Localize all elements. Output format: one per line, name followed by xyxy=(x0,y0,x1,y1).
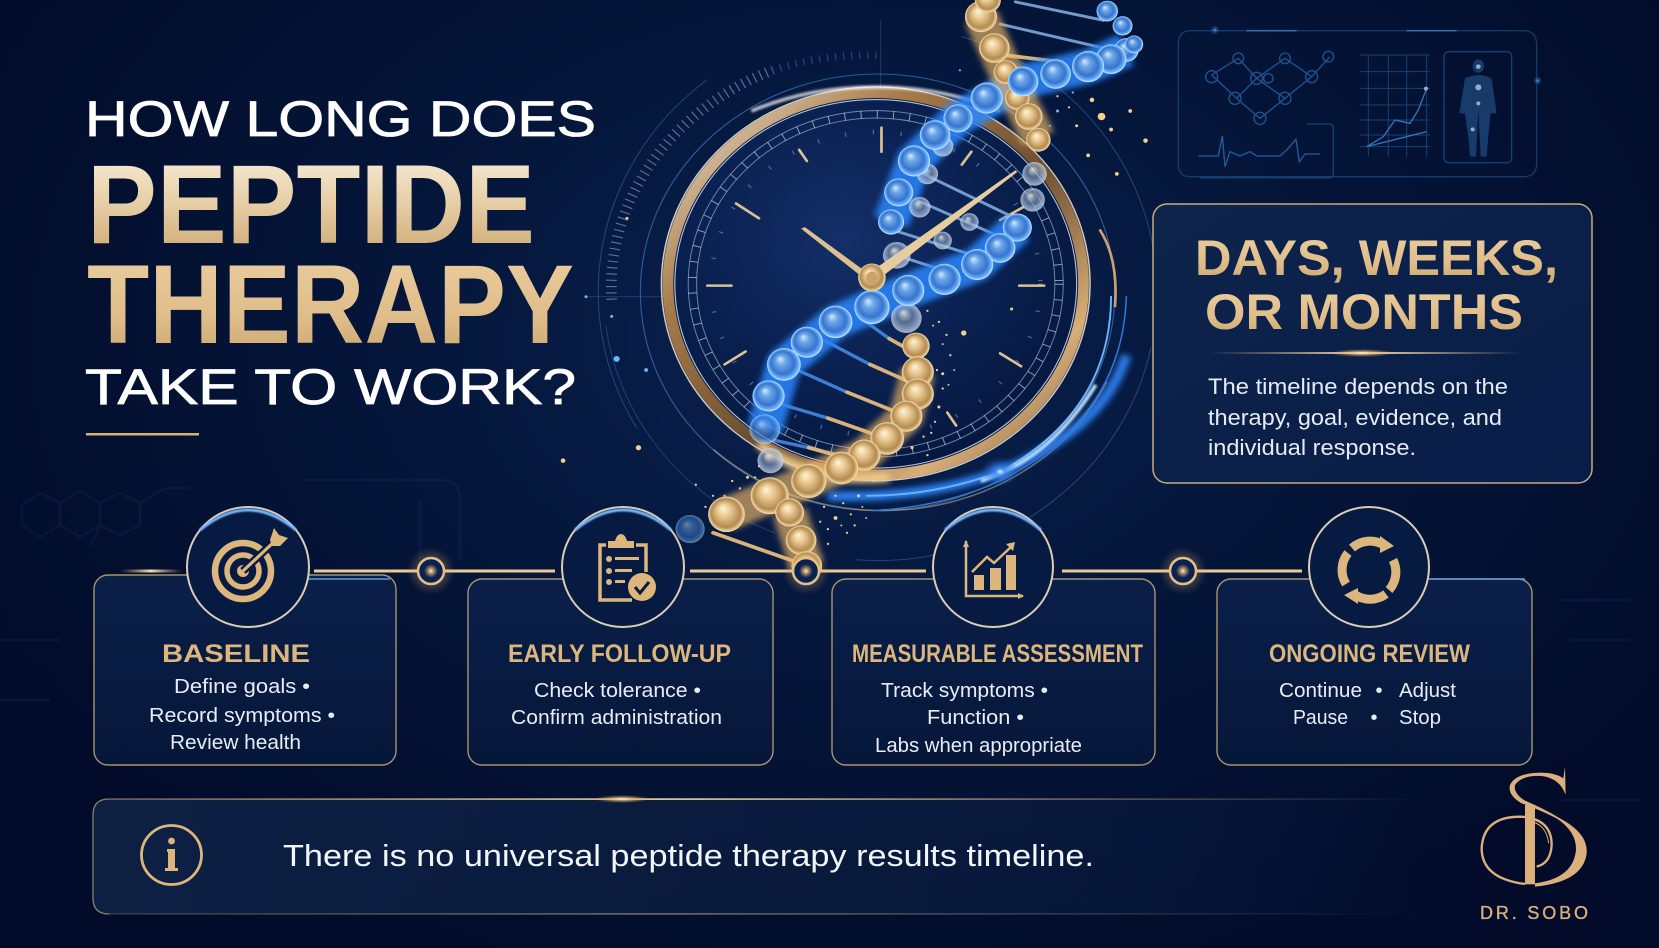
card body: Check tolerance • xyxy=(534,680,701,702)
timeline node 2 xyxy=(782,547,830,595)
timeline connector xyxy=(120,547,1302,595)
card body: Record symptoms • xyxy=(149,705,335,727)
logo monogram xyxy=(1482,767,1587,887)
card body xyxy=(149,676,335,754)
panel body text xyxy=(1208,374,1508,460)
card body: Adjust xyxy=(1399,680,1456,702)
panel: days weeks or months xyxy=(1153,204,1592,483)
card body xyxy=(875,680,1082,757)
icon: growth chart xyxy=(933,507,1053,627)
clock: outer HUD rings xyxy=(587,20,1157,561)
DNA: sparkles xyxy=(561,95,1148,545)
clock: hour markers xyxy=(707,128,1044,426)
card body xyxy=(1279,680,1456,729)
card body: Labs when appropriate xyxy=(875,735,1082,757)
clock: hands xyxy=(801,170,1017,292)
title line: peptide: PEPTIDE xyxy=(87,142,535,267)
DNA: rungs xyxy=(713,2,1103,562)
title line: take to work: TAKE TO WORK? xyxy=(85,359,576,415)
panel: diagnostic HUD xyxy=(1178,25,1542,178)
faint molecule pattern xyxy=(0,480,1640,800)
panel heading xyxy=(1195,230,1558,340)
logo: Dr. Sobo xyxy=(1480,767,1588,923)
card: baseline xyxy=(94,507,396,765)
card body: Pause xyxy=(1293,707,1348,729)
card body: Review health xyxy=(170,732,301,754)
title underline xyxy=(86,433,199,436)
card body: • xyxy=(1375,680,1383,702)
panel heading: DAYS, WEEKS, xyxy=(1195,230,1558,286)
DNA: pale translucent beads xyxy=(757,136,1047,473)
timeline node 3 xyxy=(1159,547,1207,595)
clock: bezel ring xyxy=(661,87,1090,481)
panel body text: therapy, goal, evidence, and xyxy=(1208,405,1502,430)
DNA: gold strand beads xyxy=(708,0,1051,581)
card body: • xyxy=(1370,707,1378,729)
card body: Stop xyxy=(1399,707,1441,729)
card heading: MEASURABLE ASSESSMENT xyxy=(852,640,1143,668)
logo wordmark: DR. SOBO xyxy=(1480,903,1588,923)
clock: blue swoosh xyxy=(828,229,1126,511)
icon: clipboard xyxy=(562,507,684,627)
icon: review cycle xyxy=(1309,507,1429,627)
DNA: blue glow xyxy=(765,50,1126,429)
panel divider xyxy=(1208,349,1523,357)
card heading: ONGOING REVIEW xyxy=(1269,640,1470,668)
card body: Function • xyxy=(927,707,1024,729)
card body: Continue xyxy=(1279,680,1362,702)
card heading: EARLY FOLLOW-UP xyxy=(508,640,731,668)
DNA: gold glow xyxy=(726,17,1038,566)
clock: face xyxy=(673,97,1079,471)
DNA: blue sparkles xyxy=(584,69,1074,372)
card body xyxy=(511,680,722,729)
title line: how long does: HOW LONG DOES xyxy=(85,91,596,147)
card: ongoing review xyxy=(1217,507,1532,765)
panel body text: The timeline depends on the xyxy=(1208,374,1508,399)
panel body text: individual response. xyxy=(1208,435,1416,460)
card body: Track symptoms • xyxy=(881,680,1048,702)
card body: Confirm administration xyxy=(511,707,722,729)
title line: therapy: THERAPY xyxy=(87,242,574,367)
callout: no universal timeline xyxy=(93,795,1420,915)
card heading: BASELINE xyxy=(162,640,310,668)
title xyxy=(85,91,596,436)
card: early follow-up xyxy=(468,507,773,765)
timeline node 1 xyxy=(407,547,455,595)
icon: target xyxy=(187,507,309,627)
card: measurable assessment xyxy=(832,507,1155,765)
panel heading: OR MONTHS xyxy=(1205,284,1523,340)
callout text: There is no universal peptide therapy results timeline. xyxy=(283,838,1094,873)
card body: Define goals • xyxy=(174,676,310,698)
icon: info xyxy=(142,826,202,884)
DNA: blue strand beads xyxy=(676,1,1143,543)
clock and DNA helix xyxy=(561,0,1157,581)
